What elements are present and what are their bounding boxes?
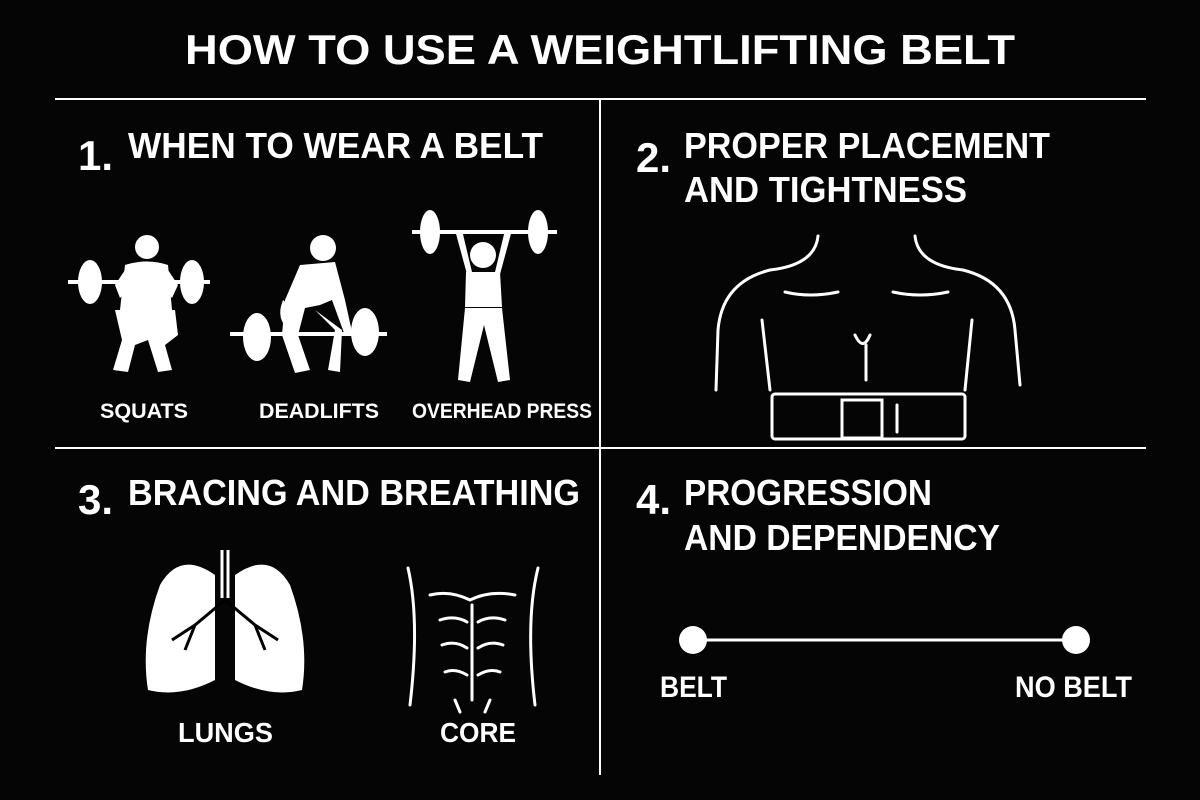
icon: squat [68, 235, 210, 372]
label: no belt: NO BELT [1015, 671, 1132, 704]
heading 3: BRACING AND BREATHING [128, 472, 580, 513]
heading 4: 4. [636, 476, 671, 523]
label: deadlifts: DEADLIFTS [259, 400, 379, 423]
label: overhead press: OVERHEAD PRESS [412, 400, 592, 423]
panel: bracing [78, 472, 580, 748]
heading 1: WHEN TO WEAR A BELT [128, 125, 543, 166]
heading 2: PROPER PLACEMENT [684, 125, 1050, 166]
label: lungs: LUNGS [178, 717, 273, 748]
icon: overhead press [412, 210, 557, 382]
heading 1: 1. [78, 132, 113, 179]
heading 4: AND DEPENDENCY [684, 517, 1000, 558]
icon: lungs [146, 550, 304, 692]
heading 4 [636, 472, 1000, 558]
heading 2: 2. [636, 134, 671, 181]
title: HOW TO USE A WEIGHTLIFTING BELT [185, 26, 1015, 73]
heading 2 [636, 125, 1050, 210]
heading 3 [78, 472, 580, 523]
icon: core [408, 568, 538, 712]
icon: deadlift [230, 235, 387, 373]
panel: when to wear a belt [68, 125, 592, 423]
timeline [679, 626, 1090, 654]
label: squats: SQUATS [100, 400, 188, 423]
heading 4: PROGRESSION [684, 472, 932, 513]
label: belt: BELT [660, 671, 727, 704]
icon: torso with belt [716, 236, 1020, 439]
panel: progression [636, 472, 1132, 704]
panel: placement [636, 125, 1050, 439]
heading 3: 3. [78, 476, 113, 523]
heading 1 [78, 125, 543, 179]
heading 2: AND TIGHTNESS [684, 169, 967, 210]
label: core: CORE [440, 717, 516, 748]
